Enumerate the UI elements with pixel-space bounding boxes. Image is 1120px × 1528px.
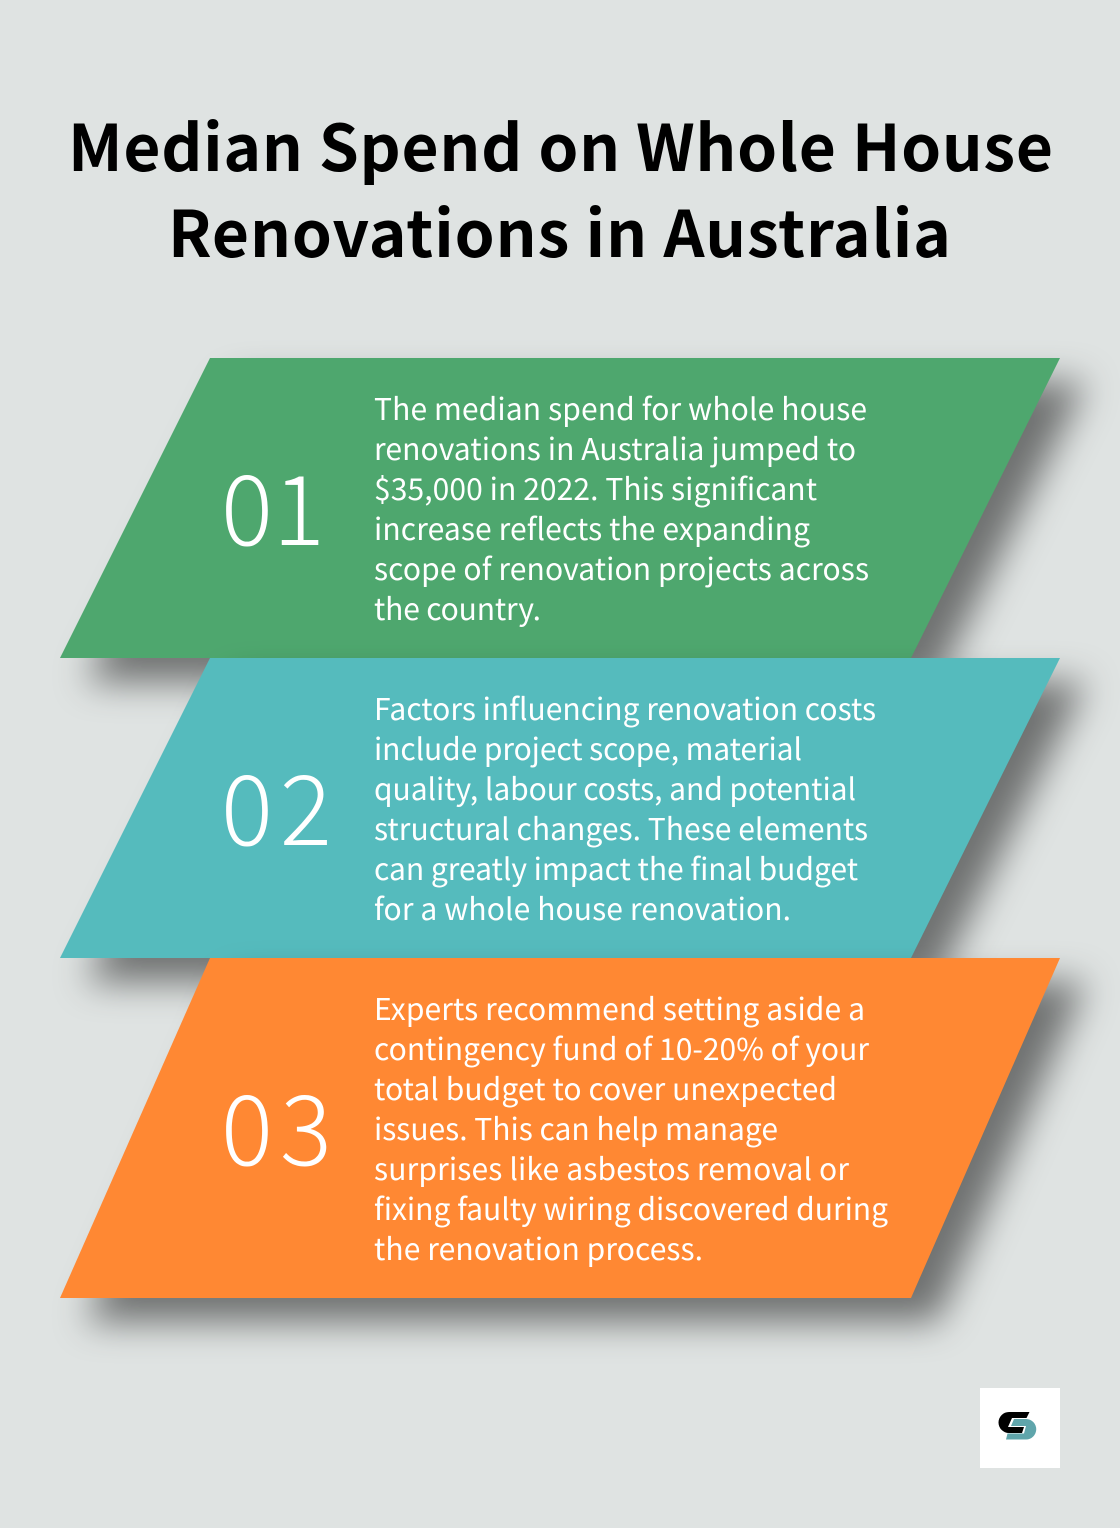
text block 01: increase reflects the expanding (374, 505, 810, 549)
text block 02: Factors influencing renovation costs (374, 685, 876, 729)
text block 02: include project scope, material (374, 725, 802, 769)
text block 01: renovations in Australia jumped to (374, 425, 856, 469)
icon: logo badge (980, 1388, 1060, 1468)
text block 02: structural changes. These elements (374, 805, 868, 849)
text block 02: for a whole house renovation. (374, 885, 791, 929)
title: Renovations in Australia (168, 184, 951, 276)
text block 03: issues. This can help manage (374, 1105, 778, 1149)
text block 03: surprises like asbestos removal or (374, 1145, 849, 1189)
text block 03: contingency fund of 10-20% of your (374, 1025, 869, 1069)
text block 03: total budget to cover unexpected (374, 1065, 837, 1109)
text block 03 (374, 985, 888, 1269)
number 02: 02 (221, 732, 332, 873)
panel: step 03 (60, 958, 1086, 1322)
text block 02 (374, 685, 876, 929)
text block 02: quality, labour costs, and potential (374, 765, 856, 809)
text block 03: fixing faulty wiring discovered during (374, 1185, 888, 1229)
text block 03: Experts recommend setting aside a (374, 985, 865, 1029)
text block 01 (374, 385, 869, 629)
title (68, 98, 1053, 276)
text block 01: the country. (374, 585, 541, 629)
text block 01: The median spend for whole house (374, 385, 867, 429)
panel: step 02 (60, 658, 1086, 982)
text block 01: scope of renovation projects across (374, 545, 869, 589)
text block 03: the renovation process. (374, 1225, 703, 1269)
number 03: 03 (221, 1052, 332, 1193)
panel: step 01 (60, 358, 1086, 682)
title: Median Spend on Whole House (68, 98, 1053, 190)
text block 02: can greatly impact the final budget (374, 845, 858, 889)
number 01: 01 (221, 432, 325, 573)
text block 01: $35,000 in 2022. This significant (374, 465, 817, 509)
